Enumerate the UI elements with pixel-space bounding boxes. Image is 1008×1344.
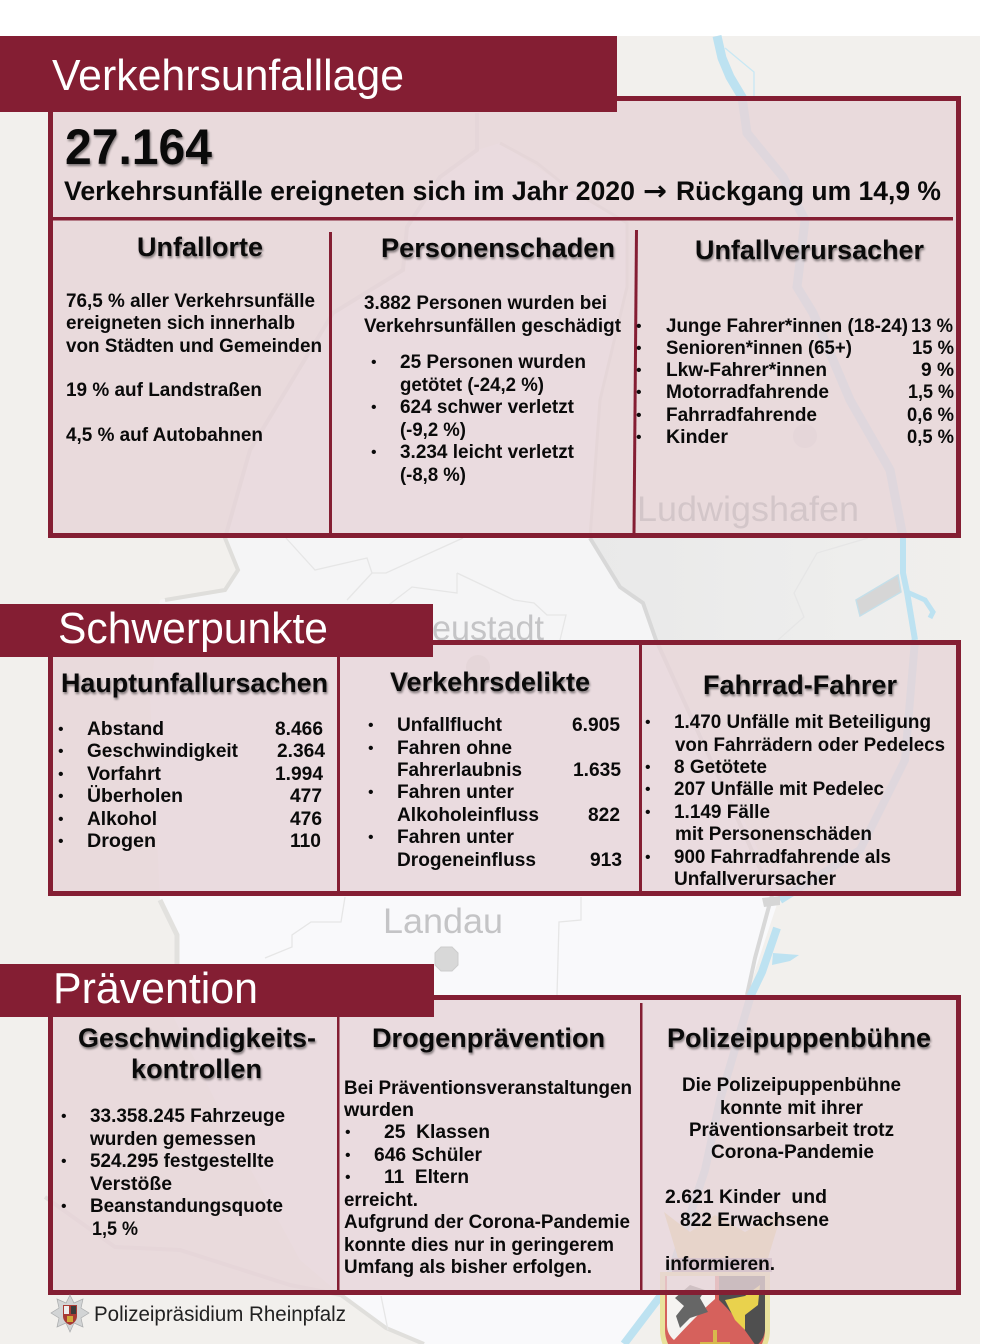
column: Unfallorte: Unfallorte: [137, 232, 263, 262]
column: Geschwindigkeitskontrollen: •: [61, 1153, 67, 1170]
footer: organisation name: Polizeipräsidium Rheinpfalz: [94, 1303, 346, 1326]
column: Fahrrad-Fahrer: [645, 670, 945, 890]
column: Drogenprävention: 25 Klassen: [384, 1121, 490, 1143]
column: Verkehrsdelikte: Alkoholeinfluss: [397, 804, 539, 826]
column: Geschwindigkeitskontrollen: •: [61, 1108, 67, 1125]
column: Unfallverursacher: •: [636, 362, 642, 379]
column: Geschwindigkeitskontrollen: 524.295 festgestellte: [90, 1150, 274, 1172]
column: Drogenprävention: Umfang als bisher erfolgen.: [344, 1256, 592, 1278]
column: Drogenprävention: konnte dies nur in geringerem: [344, 1234, 614, 1256]
column: Verkehrsdelikte: Unfallflucht: [397, 714, 502, 736]
column: Verkehrsdelikte: Fahren unter: [397, 826, 514, 848]
panel: Verkehrsunfalllage: [50, 98, 958, 536]
column: Polizeipuppenbühne: [665, 1023, 931, 1275]
column: Drogenprävention: •: [345, 1124, 351, 1141]
column: Drogenprävention: Drogenprävention: [372, 1023, 605, 1053]
column: Hauptunfallursachen: 110: [290, 830, 321, 852]
map label dots: [793, 424, 817, 448]
column: Unfallverursacher: 9 %: [921, 359, 954, 381]
column: Unfallverursacher: Motorradfahrende: [666, 381, 829, 403]
column: Verkehrsdelikte: Fahren ohne: [397, 737, 512, 759]
column: Unfallverursacher: [636, 235, 954, 448]
column: Personenschaden: getötet (-24,2 %): [400, 374, 544, 396]
column: Unfallverursacher: Kinder: [666, 426, 728, 448]
column: Personenschaden: 25 Personen wurden: [400, 351, 586, 373]
header bar: Verkehrsunfalllage: [0, 36, 617, 112]
header bar: Schwerpunkte: [0, 604, 433, 657]
map: inlet: [856, 575, 901, 616]
column: Polizeipuppenbühne: Die Polizeipuppenbühne: [682, 1074, 901, 1096]
column: Fahrrad-Fahrer: •: [645, 781, 651, 798]
column: Drogenprävention: 646 Schüler: [374, 1144, 482, 1166]
column: Drogenprävention: Aufgrund der Corona-Pandemie: [344, 1211, 630, 1233]
column: Fahrrad-Fahrer: von Fahrrädern oder Pedelecs: [675, 734, 945, 756]
column: Unfallverursacher: Senioren*innen (65+): [666, 337, 852, 359]
key statement: [64, 176, 941, 207]
column: Geschwindigkeitskontrollen: 33.358.245 Fahrzeuge: [90, 1105, 285, 1127]
column: Verkehrsdelikte: 6.905: [572, 714, 620, 736]
column: Verkehrsdelikte: •: [368, 740, 374, 757]
column: Polizeipuppenbühne: konnte mit ihrer: [720, 1097, 863, 1119]
column: Unfallverursacher: •: [636, 318, 642, 335]
column: Drogenprävention: erreicht.: [344, 1189, 418, 1211]
column: Unfallverursacher: •: [636, 407, 642, 424]
map label: Neustadt: eustadt: [432, 609, 544, 648]
column: Personenschaden: •: [371, 444, 377, 461]
column: Fahrrad-Fahrer: •: [645, 849, 651, 866]
column: Hauptunfallursachen: Vorfahrt: [87, 763, 161, 785]
column: Verkehrsdelikte: 822: [588, 804, 620, 826]
column: Unfallverursacher: Fahrradfahrende: [666, 404, 817, 426]
column: Hauptunfallursachen: Geschwindigkeit: [87, 740, 238, 762]
column: Personenschaden: (-8,8 %): [400, 464, 466, 486]
column: Fahrrad-Fahrer: 900 Fahrradfahrende als: [674, 846, 891, 868]
column: Unfallverursacher: Junge Fahrer*innen (18-24): [666, 315, 908, 337]
coat of arms: [660, 1212, 782, 1344]
column: Fahrrad-Fahrer: 207 Unfälle mit Pedelec: [674, 778, 884, 800]
map: lowland area: [150, 143, 780, 1344]
map: grey plain east of the road: [590, 538, 980, 640]
column: Fahrrad-Fahrer: Unfallverursacher: [674, 868, 836, 890]
column: Hauptunfallursachen: Alkohol: [87, 808, 157, 830]
column: Personenschaden: 3.234 leicht verletzt: [400, 441, 574, 463]
column: Verkehrsdelikte: Fahrerlaubnis: [397, 759, 522, 781]
column: Verkehrsdelikte: 913: [590, 849, 622, 871]
map: river: [717, 36, 903, 537]
column: Hauptunfallursachen: •: [58, 788, 64, 805]
column: Drogenprävention: [343, 1023, 632, 1278]
column: Fahrrad-Fahrer: •: [645, 714, 651, 731]
column: Verkehrsdelikte: [368, 667, 622, 871]
column: Fahrrad-Fahrer: 1.470 Unfälle mit Beteiligung: [674, 711, 931, 733]
column: Personenschaden: 3.882 Personen wurden bei: [364, 292, 607, 314]
column: Geschwindigkeitskontrollen: wurden gemessen: [89, 1128, 256, 1150]
column: Polizeipuppenbühne: informieren.: [665, 1253, 775, 1275]
column: Drogenprävention: Bei Präventionsveranstaltungen: [344, 1077, 632, 1099]
column: Unfallorte: 4,5 % auf Autobahnen: [66, 424, 263, 446]
key statement: →: [643, 176, 667, 207]
column: Personenschaden: •: [371, 354, 377, 371]
column: Unfallorte: 76,5 % aller Verkehrsunfälle: [66, 290, 315, 312]
column: Hauptunfallursachen: Überholen: [87, 784, 183, 807]
column: Hauptunfallursachen: [58, 668, 328, 852]
column: Hauptunfallursachen: 2.364: [277, 740, 325, 762]
column: Hauptunfallursachen: 1.994: [275, 763, 323, 785]
column: Unfallverursacher: 15 %: [912, 337, 954, 359]
column: Unfallverursacher: 1,5 %: [908, 381, 954, 403]
column: Unfallverursacher: 13 %: [911, 315, 953, 337]
footer: police logo: [51, 1295, 89, 1332]
column: Unfallverursacher: •: [636, 340, 642, 357]
column: Unfallorte: [66, 232, 322, 446]
column: Personenschaden: [364, 233, 621, 486]
column: Polizeipuppenbühne: Polizeipuppenbühne: [667, 1023, 931, 1053]
column: Verkehrsdelikte: •: [368, 717, 374, 734]
column: Drogenprävention: •: [345, 1147, 351, 1164]
header bar: Prävention: [0, 964, 434, 1017]
column: Geschwindigkeitskontrollen: Verstöße: [90, 1173, 172, 1195]
column: Verkehrsdelikte: Drogeneinfluss: [397, 849, 536, 871]
column: Hauptunfallursachen: •: [58, 743, 64, 760]
column: Polizeipuppenbühne: 2.621 Kinder und: [665, 1186, 827, 1208]
map label: Ludwigshafen: Ludwigshafen: [637, 490, 859, 529]
column: Geschwindigkeitskontrollen: [61, 1023, 316, 1240]
column: Verkehrsdelikte: Fahren unter: [397, 781, 514, 803]
column: Fahrrad-Fahrer: mit Personenschäden: [675, 823, 872, 845]
column: Personenschaden: 624 schwer verletzt: [400, 396, 574, 418]
column: Geschwindigkeitskontrollen: Geschwindigkeits-: [78, 1023, 316, 1053]
column: Geschwindigkeitskontrollen: kontrollen: [131, 1054, 262, 1084]
column: Personenschaden: (-9,2 %): [400, 419, 466, 441]
key figure: 27.164: [65, 119, 212, 175]
column: Verkehrsdelikte: 1.635: [573, 759, 621, 781]
column: Fahrrad-Fahrer: Fahrrad-Fahrer: [703, 670, 897, 700]
header bar: Verkehrsunfalllage: Verkehrsunfalllage: [52, 51, 404, 100]
column: Unfallorte: 19 % auf Landstraßen: [66, 379, 262, 401]
map: district borders: [265, 538, 868, 1330]
column: Polizeipuppenbühne: Präventionsarbeit trotz: [689, 1119, 894, 1141]
column: Unfallverursacher: 0,5 %: [907, 426, 954, 448]
column: Fahrrad-Fahrer: 8 Getötete: [674, 756, 767, 778]
column: Geschwindigkeitskontrollen: Beanstandungsquote: [90, 1195, 283, 1217]
column: Hauptunfallursachen: Drogen: [87, 830, 156, 852]
column: Hauptunfallursachen: 476: [290, 808, 322, 830]
column: Personenschaden: Personenschaden: [381, 233, 615, 263]
key statement: Rückgang um 14,9 %: [676, 176, 941, 206]
column: Drogenprävention: 11 Eltern: [384, 1166, 469, 1188]
key statement: Verkehrsunfälle ereigneten sich im Jahr 2020: [64, 176, 635, 206]
column: Geschwindigkeitskontrollen: 1,5 %: [92, 1218, 138, 1240]
column: Fahrrad-Fahrer: •: [645, 804, 651, 821]
map label: Landau: Landau: [383, 902, 503, 941]
column: Personenschaden: •: [371, 399, 377, 416]
column: Unfallverursacher: 0,6 %: [907, 404, 954, 426]
column: Unfallorte: ereigneten sich innerhalb: [66, 312, 295, 334]
column: Hauptunfallursachen: •: [58, 811, 64, 828]
column: Verkehrsdelikte: Verkehrsdelikte: [390, 667, 590, 697]
column: Geschwindigkeitskontrollen: •: [61, 1198, 67, 1215]
header bar: Prävention: Prävention: [53, 964, 258, 1013]
column: Fahrrad-Fahrer: •: [645, 759, 651, 776]
column: Hauptunfallursachen: •: [58, 833, 64, 850]
column: Hauptunfallursachen: Abstand: [87, 718, 164, 740]
map: road: [590, 538, 656, 640]
column: Fahrrad-Fahrer: 1.149 Fälle: [674, 801, 770, 823]
column: Unfallverursacher: Unfallverursacher: [695, 235, 924, 265]
column: Hauptunfallursachen: Hauptunfallursachen: [61, 668, 328, 698]
panel: Schwerpunkte: [50, 642, 958, 894]
column: Verkehrsdelikte: •: [368, 784, 374, 801]
column: Hauptunfallursachen: 8.466: [275, 718, 323, 740]
column: Hauptunfallursachen: •: [58, 721, 64, 738]
column: Verkehrsdelikte: •: [368, 829, 374, 846]
column: Drogenprävention: •: [345, 1169, 351, 1186]
column: Drogenprävention: wurden: [343, 1099, 414, 1121]
column: Unfallorte: von Städten und Gemeinden: [66, 335, 322, 357]
header bar: Schwerpunkte: Schwerpunkte: [58, 604, 328, 653]
column: Personenschaden: Verkehrsunfällen geschädigt: [364, 315, 621, 337]
column: Polizeipuppenbühne: Corona-Pandemie: [711, 1141, 874, 1163]
column: Hauptunfallursachen: 477: [290, 785, 322, 807]
column: Polizeipuppenbühne: 822 Erwachsene: [680, 1209, 829, 1231]
column: Unfallverursacher: •: [636, 384, 642, 401]
column: Unfallverursacher: Lkw-Fahrer*innen: [666, 359, 827, 381]
column: Unfallverursacher: •: [636, 429, 642, 446]
column: Hauptunfallursachen: •: [58, 766, 64, 783]
panel: Prävention: [50, 998, 958, 1292]
